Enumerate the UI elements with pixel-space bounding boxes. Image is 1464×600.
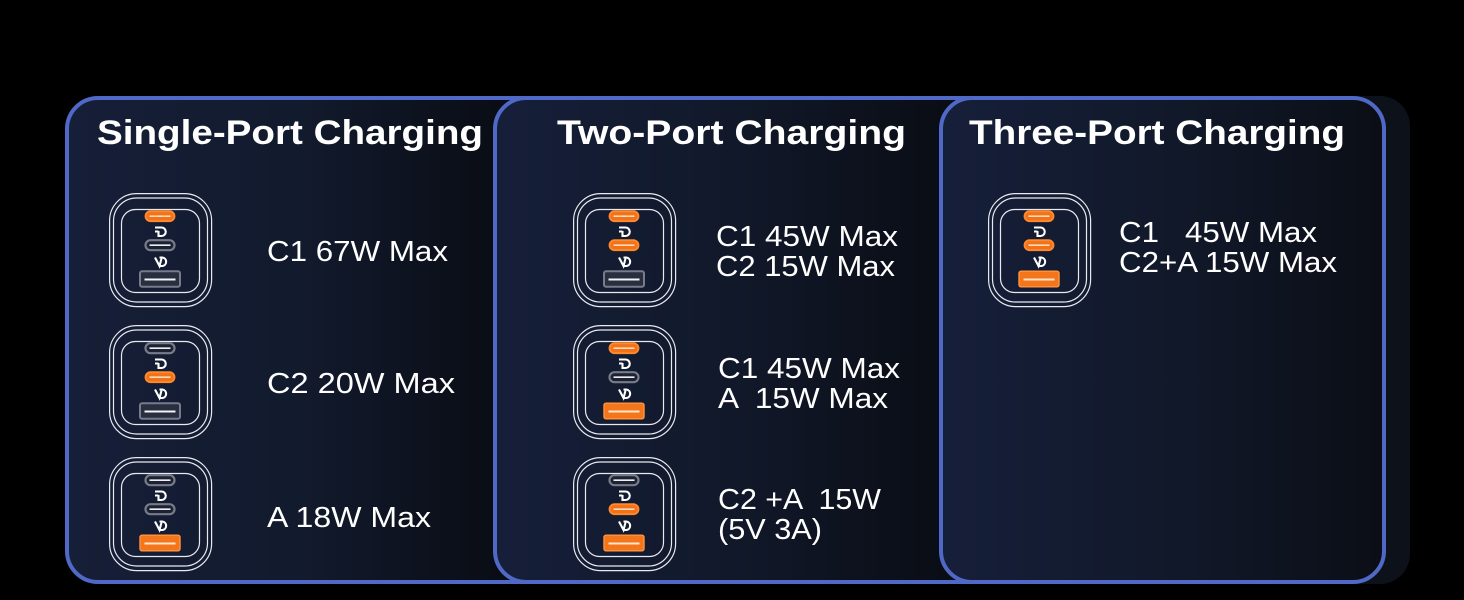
label: C1 67W: C1 67W Max bbox=[267, 236, 449, 268]
charger icon: C1 and C2 active bbox=[574, 194, 676, 307]
charger icon: A active bbox=[110, 458, 212, 571]
label: C1 45W, A 15W: C1 45W Max bbox=[718, 353, 901, 385]
panel: three-port charging bbox=[941, 98, 1384, 582]
charger icon: C1 and A active bbox=[574, 326, 676, 439]
dark backing panel bbox=[900, 96, 1410, 584]
label: A 18W: A 18W Max bbox=[267, 502, 432, 534]
label: C1 45W, C2+A 15W: C1 45W Max bbox=[1119, 217, 1318, 249]
charger icon: all ports active bbox=[989, 194, 1091, 307]
label: C1 45W, C2 15W: C1 45W Max bbox=[716, 221, 899, 253]
label: C2+A 15W: (5V 3A) bbox=[718, 514, 822, 546]
panel: single-port charging bbox=[67, 98, 627, 582]
label: C1 45W, C2 15W: C2 15W Max bbox=[716, 251, 896, 283]
label: C1 45W, C2 15W bbox=[716, 221, 899, 283]
label: C1 45W, C2+A 15W bbox=[1119, 217, 1338, 279]
heading: three-port: Three-Port Charging bbox=[969, 114, 1345, 152]
label: C1 45W, A 15W bbox=[718, 353, 901, 415]
label: C2+A 15W: C2 +A 15W bbox=[718, 484, 882, 516]
label: C1 45W, C2+A 15W: C2+A 15W Max bbox=[1119, 247, 1338, 279]
charger icon: C2 and A active bbox=[574, 458, 676, 571]
panel: two-port charging bbox=[495, 98, 1055, 582]
heading: two-port: Two-Port Charging bbox=[557, 114, 906, 152]
label: C2+A 15W bbox=[718, 484, 882, 546]
label: C1 45W, A 15W: A 15W Max bbox=[718, 383, 889, 415]
charger icon: C1 active bbox=[110, 194, 212, 307]
heading: single-port: Single-Port Charging bbox=[97, 114, 483, 152]
charger icon: C2 active bbox=[110, 326, 212, 439]
label: C2 20W: C2 20W Max bbox=[267, 368, 456, 400]
